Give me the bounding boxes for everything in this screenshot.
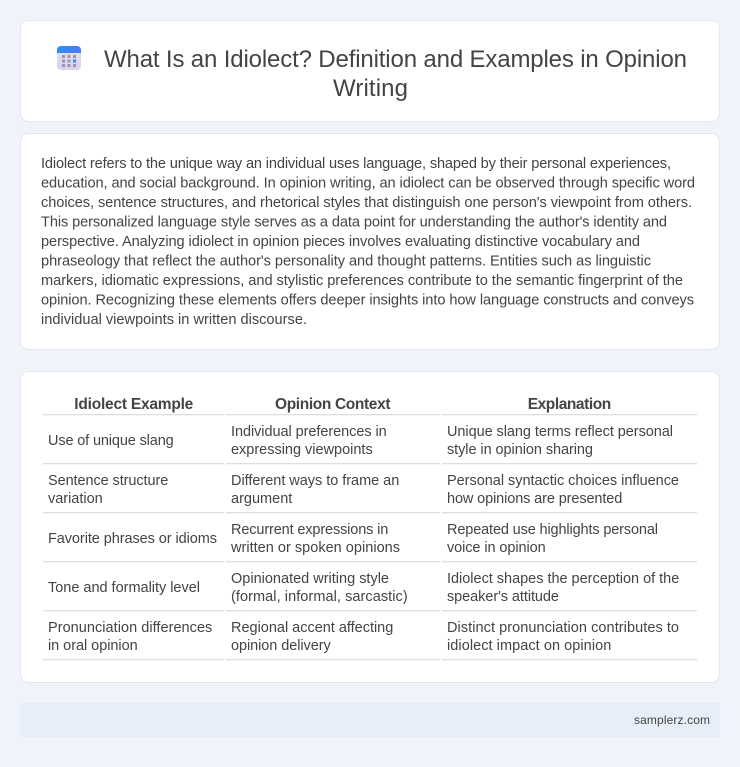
row: favorite phrases: Repeated use highlights personal	[447, 522, 658, 538]
row: favorite phrases: voice in opinion	[447, 540, 546, 556]
text block: definition paragraph: opinion. Recognizing these elements offers deeper insights into how language constructs and conveys	[41, 292, 694, 308]
row: tone and formality: (formal, informal, sarcastic)	[231, 589, 408, 605]
text block: definition paragraph	[41, 156, 695, 328]
text block: definition paragraph: education, and social background. In opinion writing, an idiolect can be observed through specific word	[41, 176, 695, 192]
row: unique slang	[48, 424, 673, 458]
title: Writing	[333, 75, 408, 102]
title: What Is an Idiolect? Definition and Examples in Opinion	[104, 46, 687, 73]
text block: definition paragraph: markers, idiomatic expressions, and stylistic preferences contribute to the semantic fingerprint of the	[41, 273, 683, 289]
table header: Explanation	[528, 396, 611, 413]
panel: definition text	[20, 134, 720, 350]
row: favorite phrases: Recurrent expressions in	[231, 522, 388, 538]
table header	[74, 396, 611, 413]
table header: Idiolect Example	[74, 396, 194, 413]
row: unique slang: style in opinion sharing	[447, 442, 593, 458]
row: unique slang: expressing viewpoints	[231, 442, 373, 458]
row: sentence structure: Different ways to frame an	[231, 473, 399, 489]
row: sentence structure: Sentence structure	[48, 473, 168, 489]
row: tone and formality: Opinionated writing style	[231, 571, 389, 587]
text block: definition paragraph: This personalized language style serves as a data point for understanding the author's identity and	[41, 214, 667, 230]
text block: definition paragraph: individual viewpoints in written discourse.	[41, 312, 307, 328]
text block: definition paragraph: choices, sentence structures, and rhetorical styles that distinguish one person's viewpoint from others.	[41, 195, 692, 211]
row: sentence structure: argument	[231, 491, 292, 507]
title	[104, 46, 687, 102]
icon: calendar	[57, 46, 81, 70]
row: tone and formality: Tone and formality level	[48, 580, 200, 596]
panel: title header	[20, 20, 720, 122]
row: sentence structure: how opinions are presented	[447, 491, 622, 507]
row: pronunciation: idiolect impact on opinion	[447, 638, 611, 654]
row: pronunciation: Distinct pronunciation contributes to	[447, 620, 679, 636]
row: sentence structure	[48, 473, 679, 507]
row: tone and formality: Idiolect shapes the perception of the	[447, 571, 679, 587]
row: unique slang: Individual preferences in	[231, 424, 387, 440]
row: favorite phrases: written or spoken opinions	[230, 540, 400, 556]
row: pronunciation	[48, 620, 679, 654]
row: pronunciation: opinion delivery	[231, 638, 331, 654]
table rules	[43, 414, 697, 660]
row: favorite phrases	[48, 522, 658, 556]
panel: idiolect table	[20, 372, 720, 682]
row: unique slang: Use of unique slang	[48, 433, 174, 449]
text block: definition paragraph: Idiolect refers to the unique way an individual uses language, shaped by their personal experiences,	[41, 156, 671, 172]
row: tone and formality	[48, 571, 679, 605]
footer bar	[20, 703, 720, 737]
row: pronunciation: in oral opinion	[48, 638, 138, 654]
text block: definition paragraph: perspective. Analyzing idiolect in opinion pieces involves evaluating distinctive vocabulary and	[41, 234, 640, 250]
text block: definition paragraph: phraseology that reflect the author's personality and thought patterns. Entities such as linguistic	[41, 254, 651, 270]
row: sentence structure: Personal syntactic choices influence	[447, 473, 679, 489]
row: pronunciation: Regional accent affecting	[231, 620, 393, 636]
footer source text: samplerz.com	[634, 713, 710, 727]
table header: Opinion Context	[275, 396, 390, 413]
row: tone and formality: speaker's attitude	[447, 589, 559, 605]
row: pronunciation: Pronunciation differences	[48, 620, 212, 636]
row: sentence structure: variation	[48, 491, 103, 507]
row: favorite phrases: Favorite phrases or idioms	[48, 531, 217, 547]
row: unique slang: Unique slang terms reflect personal	[447, 424, 673, 440]
